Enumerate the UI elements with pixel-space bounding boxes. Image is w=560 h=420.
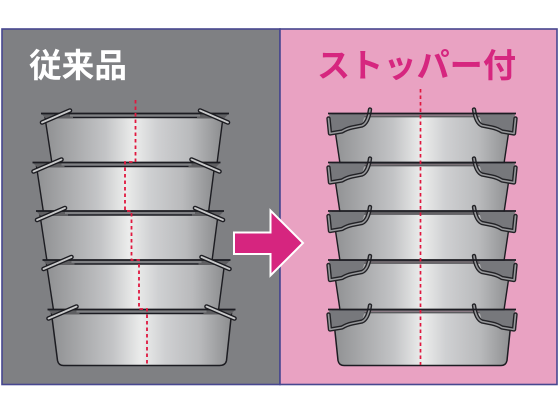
- stack of conventional pans: [32, 110, 236, 366]
- pan 5: [328, 306, 516, 366]
- panel: with stopper: [280, 29, 557, 384]
- pan 5: [48, 306, 236, 366]
- heading: conventional: 従来品: [29, 47, 127, 84]
- stack of stopper pans: [328, 110, 516, 366]
- pan 3: [36, 208, 224, 261]
- pan 1: [328, 110, 516, 164]
- heading: with stopper: ストッパー付: [317, 47, 516, 84]
- panel: conventional product: [2, 29, 280, 384]
- pan 1: [41, 110, 229, 164]
- pan 4: [328, 256, 516, 310]
- straight red centre line: [420, 89, 422, 365]
- pan 2: [328, 158, 516, 212]
- pan 3: [328, 207, 516, 261]
- arrow: [234, 210, 303, 276]
- misaligned red centre line: [125, 100, 147, 365]
- pan 4: [42, 257, 230, 310]
- pan 2: [32, 160, 220, 212]
